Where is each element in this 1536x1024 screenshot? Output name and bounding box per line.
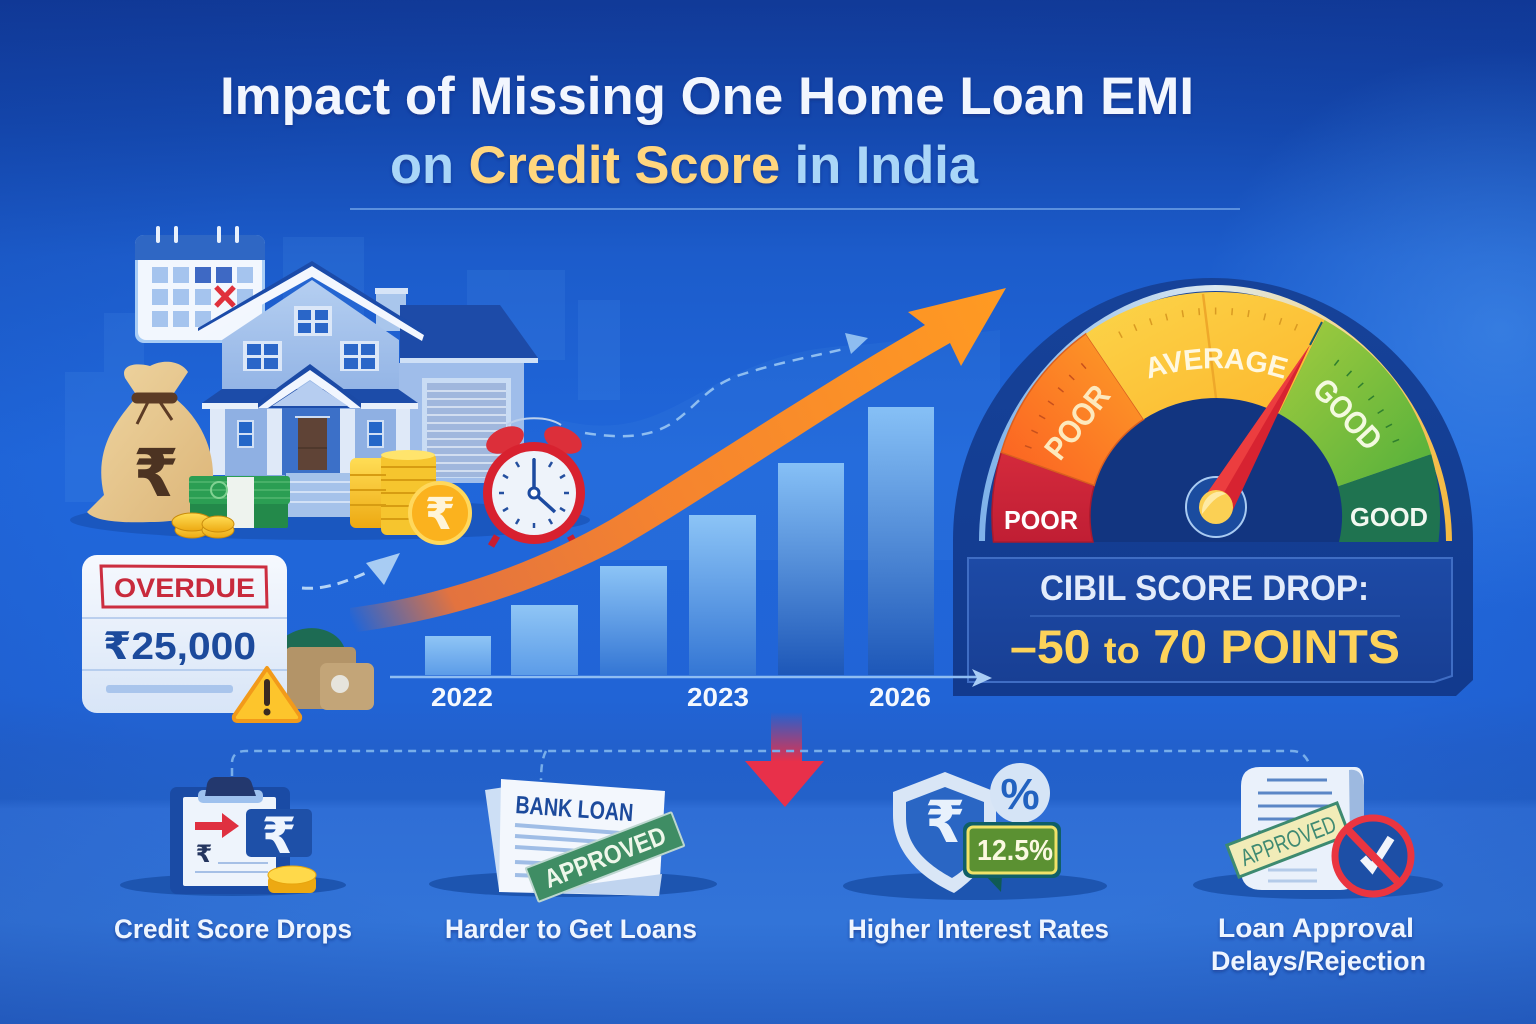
title: on Credit Score in India	[390, 136, 979, 195]
panel: CIBIL score drop	[968, 558, 1452, 682]
gauge segment: orange poor: POOR	[1037, 378, 1117, 466]
title: Impact of Missing One Home Loan EMI	[220, 67, 1194, 126]
illustration: gold coin stacks: ₹	[425, 490, 455, 539]
label: Higher Interest Rates	[848, 914, 1109, 944]
gauge segment: orange poor	[1001, 334, 1144, 485]
panel value: –50 to 70 POINTS	[1010, 620, 1400, 673]
credit score gauge	[953, 278, 1473, 696]
illustration: rupee money bag	[87, 362, 213, 522]
gauge segment: dark green good: GOOD	[1350, 502, 1428, 532]
icon: warning triangle	[234, 668, 300, 721]
gauge segment: red poor: POOR	[1004, 505, 1078, 535]
chart axis with years: 2026	[869, 682, 931, 712]
consequence: higher interest rates	[843, 763, 1109, 944]
icon: clipboard with rupee: ₹	[196, 841, 212, 868]
gauge segment: green good	[1279, 320, 1431, 486]
icon: percent badge	[990, 763, 1050, 823]
panel heading: CIBIL SCORE DROP:	[1040, 569, 1369, 608]
illustration: house	[70, 261, 590, 540]
overdue amount: ₹25,000	[103, 626, 256, 668]
icon: document	[1241, 767, 1364, 890]
icon: 12.5% rate tag: 12.5%	[977, 835, 1053, 867]
overdue stamp	[101, 566, 267, 607]
approved stamp: APPROVED	[1237, 811, 1340, 872]
illustration: gold coin stacks	[350, 450, 470, 543]
arrow: red down	[745, 712, 824, 807]
bar chart	[425, 407, 934, 675]
approved stamp: APPROVED	[540, 820, 670, 894]
label	[1211, 913, 1426, 976]
illustration: cash stacks and small coins	[172, 476, 290, 538]
icon: 12.5% rate tag	[963, 822, 1061, 892]
icon: bank loan document: BANK LOAN	[515, 791, 634, 827]
gauge segment: dark green good	[1338, 454, 1440, 542]
icon: shield with rupee: ₹	[925, 790, 965, 855]
arrow: big orange rising trend	[350, 288, 1006, 633]
gauge needle	[1199, 322, 1322, 524]
icon: clipboard with rupee	[170, 777, 316, 894]
dashed connector to consequences	[232, 751, 1310, 780]
label: Harder to Get Loans	[445, 914, 697, 944]
gauge segment: yellow average	[1086, 292, 1324, 420]
consequence: harder to get loans	[429, 779, 717, 944]
consequence: loan approval delays or rejection	[1193, 767, 1443, 976]
icon: percent badge: %	[1000, 770, 1040, 819]
illustration: rupee money bag: ₹	[133, 436, 179, 510]
gauge segment: red poor	[992, 452, 1094, 542]
overdue card	[82, 555, 287, 713]
chart axis with years: 2023	[687, 682, 749, 712]
icon: clipboard with rupee: ₹	[262, 808, 296, 864]
arrow: overdue to chart dashed	[302, 553, 400, 588]
chart axis with years: 2022	[431, 682, 493, 712]
illustration: red alarm clock	[482, 418, 586, 546]
approved stamp	[1227, 803, 1349, 877]
gauge inner dial	[1088, 396, 1344, 542]
icon: prohibition sign	[1335, 818, 1411, 894]
overdue stamp: OVERDUE	[114, 573, 255, 603]
illustration: calendar with missed date	[135, 228, 265, 343]
chart axis with years	[390, 669, 992, 712]
label: Delays/Rejection	[1211, 946, 1426, 976]
gauge segment: green good: GOOD	[1306, 371, 1389, 457]
label: Credit Score Drops	[114, 914, 352, 944]
icon: bank loan document	[485, 779, 684, 902]
illustration: wallet	[286, 628, 374, 710]
gauge hub ring	[1186, 477, 1246, 537]
gauge segment: yellow average: AVERAGE	[1148, 348, 1288, 379]
arrow: upper dashed trend	[585, 333, 868, 436]
gauge housing	[953, 278, 1473, 696]
icon: shield with rupee	[893, 772, 996, 893]
title	[220, 67, 1194, 195]
consequence: credit score drops	[114, 777, 352, 944]
label: Loan Approval	[1218, 913, 1414, 943]
